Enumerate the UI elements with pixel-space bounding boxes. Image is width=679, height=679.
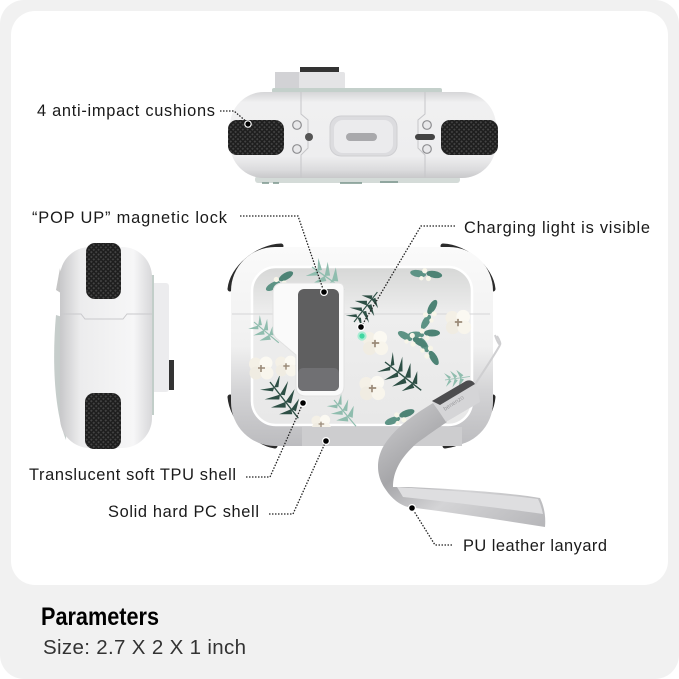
screws and sensor bbox=[293, 121, 431, 153]
side view of case bbox=[54, 243, 174, 449]
upper cushion bbox=[86, 243, 121, 299]
clasp on top bbox=[275, 67, 345, 95]
label: lanyard: PU leather lanyard bbox=[463, 537, 607, 555]
strap inner layer bbox=[397, 487, 543, 514]
floral fringe bbox=[255, 88, 460, 183]
left cushion bbox=[228, 120, 284, 155]
parameters heading: Parameters bbox=[41, 603, 159, 631]
leader: magnetic lock bbox=[240, 216, 327, 295]
bottom band of frame bbox=[302, 427, 462, 446]
lower cushion bbox=[85, 393, 121, 449]
floral print bbox=[247, 256, 471, 434]
leader: cushions bbox=[220, 111, 251, 127]
leader: TPU shell bbox=[246, 400, 306, 477]
translucent window bbox=[252, 267, 472, 425]
label: PC shell: Solid hard PC shell bbox=[108, 503, 259, 521]
label: TPU shell: Translucent soft TPU shell bbox=[29, 466, 236, 484]
bumpers bbox=[230, 246, 493, 446]
size text: Size: 2.7 X 2 X 1 inch bbox=[43, 636, 246, 659]
metal clasp bbox=[432, 380, 480, 422]
side body bbox=[60, 247, 152, 448]
label: 4 anti-impact cushions: 4 anti-impact cushions bbox=[37, 102, 215, 120]
right cushion bbox=[441, 120, 498, 155]
floral edges bbox=[54, 268, 154, 440]
leader: lanyard bbox=[409, 505, 452, 545]
leader: charging light bbox=[358, 226, 455, 330]
case body bbox=[230, 92, 496, 178]
top view of case bbox=[228, 67, 498, 183]
charging port bbox=[330, 116, 397, 156]
magnetic lock bbox=[273, 283, 344, 396]
brand mark: benenzo bbox=[443, 395, 466, 413]
leader: PC shell bbox=[269, 438, 329, 514]
side clasp bbox=[148, 283, 174, 392]
strap bbox=[378, 403, 545, 527]
hard PC frame bbox=[231, 247, 493, 446]
lanyard bbox=[378, 335, 545, 527]
label: POP UP magnetic lock: “POP UP” magnetic lock bbox=[32, 209, 228, 227]
label: charging light: Charging light is visible bbox=[464, 219, 650, 237]
green charging light bbox=[358, 332, 366, 340]
side loop bbox=[470, 335, 500, 392]
front view of case bbox=[230, 246, 493, 446]
